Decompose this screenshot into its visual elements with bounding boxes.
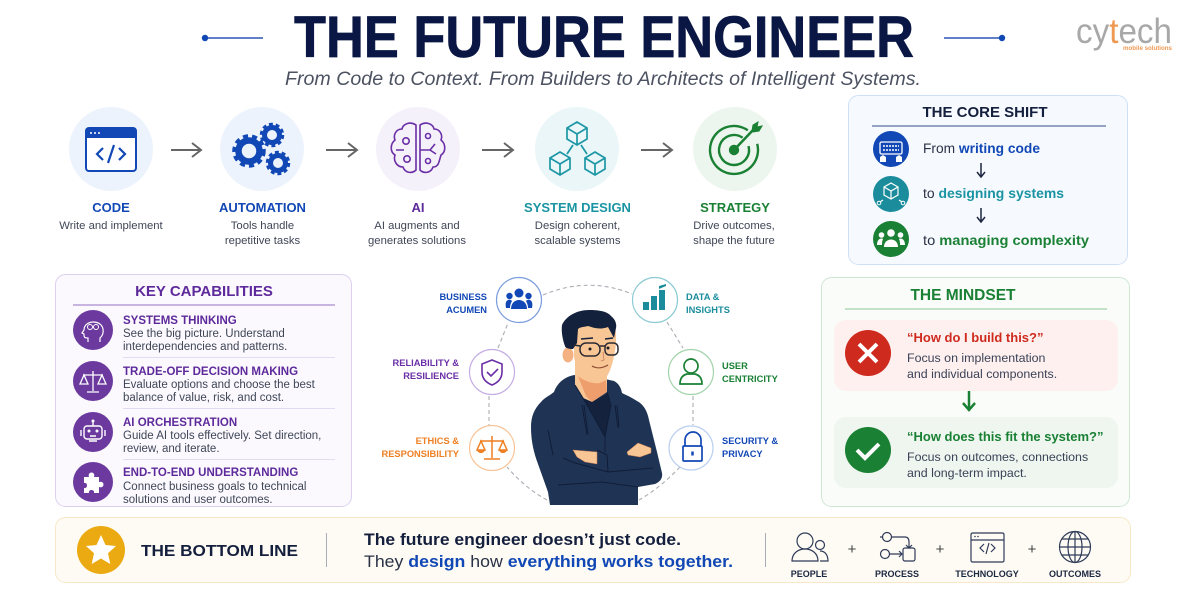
header xyxy=(202,5,1005,90)
arrow down xyxy=(977,208,985,222)
node: data and insights: INSIGHTS xyxy=(686,305,730,315)
old mindset card xyxy=(834,320,1118,391)
step: strategy: Drive outcomes, xyxy=(693,220,775,232)
step: automation: Tools handle xyxy=(231,220,294,232)
capability: trade-off decision making xyxy=(73,361,316,404)
formula: people xyxy=(791,533,828,579)
panel: the core shift xyxy=(848,96,1128,264)
arrow xyxy=(482,143,513,157)
heading: THE MINDSET xyxy=(910,287,1016,304)
plus: + xyxy=(848,541,857,558)
node: security and privacy: PRIVACY xyxy=(722,449,763,459)
node: user centricity: USER xyxy=(722,361,748,371)
node: reliability and resilience xyxy=(393,350,514,394)
node: business acumen: BUSINESS xyxy=(439,292,487,302)
node: security and privacy: SECURITY & xyxy=(722,436,778,446)
old mindset card: “How do I build this?” xyxy=(907,330,1043,345)
plus: + xyxy=(1028,541,1037,558)
arrow xyxy=(171,143,201,157)
statement: They design how everything works together. xyxy=(364,552,733,571)
capability: trade-off decision making: Evaluate options and choose the best xyxy=(123,379,316,391)
skills ring diagram xyxy=(382,278,779,505)
arrow down xyxy=(977,163,985,177)
node: data and insights: DATA & xyxy=(686,292,720,302)
new mindset card: and long-term impact. xyxy=(907,466,1027,480)
plus: + xyxy=(936,541,945,558)
capability: trade-off decision making: TRADE-OFF DECISION MAKING xyxy=(123,366,298,378)
subtitle: From Code to Context. From Builders to Architects of Intelligent Systems. xyxy=(285,69,921,90)
step: code: Write and implement xyxy=(59,220,164,232)
capability: end-to-end understanding: END-TO-END UNDERSTANDING xyxy=(123,467,298,479)
formula: process: PROCESS xyxy=(875,569,919,579)
node: ethics and responsibility xyxy=(382,426,514,470)
step: system design: Design coherent, xyxy=(535,220,620,232)
formula: outcomes xyxy=(1049,532,1101,579)
step: code xyxy=(59,107,164,232)
logo: cytech: mobile solutions xyxy=(1123,45,1172,52)
text: from writing code: From writing code xyxy=(923,141,1040,156)
icon: target xyxy=(710,122,762,174)
capability: systems thinking: interdependencies and patterns. xyxy=(123,341,287,353)
step: AI: AI augments and xyxy=(374,220,460,232)
text: to managing complexity: to managing complexity xyxy=(923,232,1089,248)
capability: systems thinking: See the big picture. Understand xyxy=(123,328,285,340)
new mindset card xyxy=(834,417,1118,488)
capability: systems thinking xyxy=(73,310,287,353)
node: user centricity: CENTRICITY xyxy=(722,374,779,384)
formula: technology xyxy=(955,533,1019,579)
icon: code window xyxy=(86,128,136,171)
capability: AI orchestration: AI ORCHESTRATION xyxy=(123,417,237,429)
formula: people: PEOPLE xyxy=(791,569,827,579)
left title accent xyxy=(202,35,263,41)
capability: AI orchestration: review, and iterate. xyxy=(123,443,220,455)
icon: star badge xyxy=(77,526,125,574)
node: ethics and responsibility: ETHICS & xyxy=(416,436,459,446)
step: AI: AI xyxy=(412,200,424,215)
node: business acumen xyxy=(439,278,542,322)
node: reliability and resilience: RELIABILITY & xyxy=(393,358,459,368)
icon: designing systems xyxy=(873,176,909,212)
capability: end-to-end understanding xyxy=(73,462,306,506)
capability: trade-off decision making: balance of value, risk, and cost. xyxy=(123,392,284,404)
capability: AI orchestration xyxy=(73,412,321,455)
old mindset card: Focus on implementation xyxy=(907,351,1046,365)
icon: gears xyxy=(234,124,288,174)
formula: process xyxy=(875,532,919,579)
heading: THE CORE SHIFT xyxy=(922,104,1048,121)
text: to designing systems: to designing systems xyxy=(923,186,1064,201)
step: strategy: shape the future xyxy=(693,235,775,247)
evolution steps xyxy=(59,107,777,247)
new mindset card: Focus on outcomes, connections xyxy=(907,450,1088,464)
heading: KEY CAPABILITIES xyxy=(135,283,273,300)
step: AI xyxy=(368,107,466,247)
icon: check xyxy=(845,427,891,473)
step: system design xyxy=(524,107,631,247)
step: system design: scalable systems xyxy=(534,235,621,247)
node: ethics and responsibility: RESPONSIBILITY xyxy=(382,449,460,459)
capability: end-to-end understanding: solutions and user outcomes. xyxy=(123,494,273,506)
panel: the bottom line xyxy=(56,518,1130,582)
statement: The future engineer doesn’t just code. xyxy=(364,531,681,549)
node: user centricity xyxy=(668,350,779,394)
step: system design: SYSTEM DESIGN xyxy=(524,200,631,215)
icon: connected cubes xyxy=(550,122,605,175)
dashed ring xyxy=(489,285,693,500)
icon: cross xyxy=(845,330,891,376)
panel: the mindset xyxy=(822,278,1130,506)
old mindset card: and individual components. xyxy=(907,367,1057,381)
new mindset card: “How does this fit the system?” xyxy=(907,429,1103,444)
step: code: CODE xyxy=(92,200,130,215)
statement xyxy=(364,531,733,571)
illustration: engineer with crossed arms xyxy=(531,310,662,505)
title: THE FUTURE ENGINEER xyxy=(294,5,914,70)
formula: outcomes: OUTCOMES xyxy=(1049,569,1101,579)
capability: end-to-end understanding: Connect business goals to technical xyxy=(123,481,306,493)
icon: managing complexity xyxy=(873,221,909,257)
right title accent xyxy=(944,35,1005,41)
node: reliability and resilience: RESILIENCE xyxy=(403,371,459,381)
capability: AI orchestration: Guide AI tools effectively. Set direction, xyxy=(123,430,321,442)
node: business acumen: ACUMEN xyxy=(446,305,487,315)
panel: key capabilities xyxy=(56,274,352,506)
node: data and insights xyxy=(632,278,730,322)
arrow xyxy=(641,143,672,157)
arrow down xyxy=(963,391,975,410)
node: security and privacy xyxy=(669,426,778,470)
step: strategy xyxy=(693,107,777,247)
step: automation xyxy=(219,107,306,247)
logo: cytech: cytech xyxy=(1076,12,1172,51)
icon: brain xyxy=(391,123,445,172)
arrow xyxy=(326,143,357,157)
icon: writing code xyxy=(873,131,909,167)
step: automation: repetitive tasks xyxy=(225,235,301,247)
capability: systems thinking: SYSTEMS THINKING xyxy=(123,315,237,327)
step: automation: AUTOMATION xyxy=(219,200,306,215)
step: AI: generates solutions xyxy=(368,235,466,247)
formula: technology: TECHNOLOGY xyxy=(955,569,1019,579)
step: strategy: STRATEGY xyxy=(700,200,770,215)
heading: THE BOTTOM LINE xyxy=(141,543,298,560)
